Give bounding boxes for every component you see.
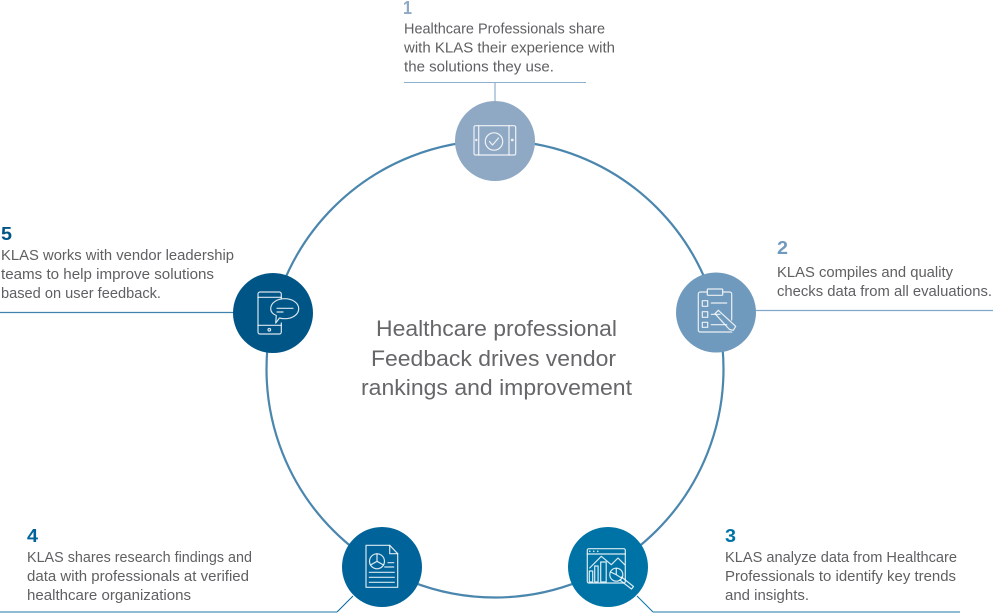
step 2 connector <box>755 310 993 312</box>
step 2 text <box>777 265 992 300</box>
icon: clipboard checklist with pencil <box>698 289 736 332</box>
step 3 connector <box>637 596 960 612</box>
step 1 text <box>403 22 615 76</box>
step 1 connector <box>404 82 586 102</box>
step 5 <box>0 223 313 353</box>
step 2 number: 2 <box>777 237 788 258</box>
step 4 text: healthcare organizations <box>27 588 191 604</box>
step 5 text: based on user feedback. <box>1 286 161 302</box>
step 4 <box>0 525 422 612</box>
step 5 badge <box>233 273 313 353</box>
ring connecting the steps <box>266 140 724 598</box>
step 2 <box>676 237 993 352</box>
icon: document with pie chart <box>366 545 398 587</box>
center statement: Healthcare professional <box>376 316 617 341</box>
step 4 text <box>27 550 252 604</box>
step 2 badge <box>676 272 756 352</box>
step 1 text: with KLAS their experience with <box>403 40 615 56</box>
step 5 number: 5 <box>1 223 12 244</box>
step 5 text: teams to help improve solutions <box>1 267 214 283</box>
step 4 badge <box>342 527 422 607</box>
icon: tablet with check mark <box>474 126 516 155</box>
step 4 text: data with professionals at verified <box>27 569 249 585</box>
center statement <box>361 316 632 400</box>
step 3 text: KLAS analyze data from Healthcare <box>725 550 957 566</box>
step 3 text: and insights. <box>725 588 809 604</box>
step 5 text <box>1 248 234 302</box>
step 2 text: checks data from all evaluations. <box>777 284 992 300</box>
step 3 <box>568 525 960 612</box>
step 1 badge <box>455 101 535 181</box>
step 3 text <box>725 550 957 604</box>
step 5 connector <box>0 312 234 314</box>
step 4 text: KLAS shares research findings and <box>27 550 252 566</box>
step 1 text: Healthcare Professionals share <box>404 22 605 38</box>
step 2 text: KLAS compiles and quality <box>777 265 954 281</box>
step 4 connector <box>0 596 353 612</box>
icon: analytics window with magnifier <box>587 549 634 589</box>
step 4 number: 4 <box>27 525 39 546</box>
step 1 <box>403 0 615 181</box>
step 3 number: 3 <box>725 525 736 546</box>
center statement: Feedback drives vendor <box>371 346 616 371</box>
icon: smartphone with speech bubble <box>258 292 299 334</box>
step 3 text: Professionals to identify key trends <box>725 569 956 585</box>
step 3 badge <box>568 527 648 607</box>
center statement: rankings and improvement <box>361 375 632 400</box>
step 1 text: the solutions they use. <box>404 60 554 76</box>
step 5 text: KLAS works with vendor leadership <box>1 248 234 264</box>
